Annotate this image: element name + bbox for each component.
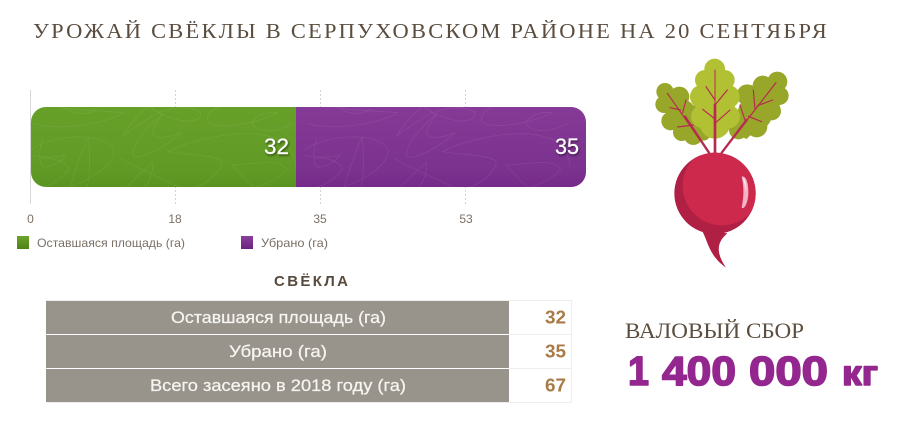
axis labels: 0	[27, 212, 34, 226]
table	[46, 300, 572, 402]
axis labels: 53	[459, 212, 473, 226]
highlight	[742, 176, 748, 208]
gross harvest value	[628, 348, 878, 394]
row: remaining area: 32	[545, 308, 566, 328]
gross harvest value: кг	[842, 354, 878, 393]
row: remaining area: Оставшаяся площадь (га)	[171, 308, 386, 327]
chart grid lines	[30, 90, 466, 204]
left leaf	[655, 83, 711, 145]
row: harvested: Убрано (га)	[229, 342, 327, 361]
stems and veins	[667, 70, 776, 153]
gross harvest value: 1	[628, 348, 649, 394]
row: total sown: 67	[545, 376, 566, 396]
legend	[17, 236, 328, 250]
gross harvest label: ВАЛОВЫЙ СБОР	[625, 318, 804, 343]
root	[702, 230, 727, 268]
axis labels	[27, 212, 473, 226]
axis labels: 35	[313, 212, 327, 226]
row: harvested	[46, 335, 566, 368]
value: 32: 32	[264, 134, 289, 159]
value: 35: 35	[555, 134, 579, 159]
gross harvest value: 000	[749, 348, 828, 394]
row: total sown	[46, 369, 566, 402]
right leaf	[729, 72, 789, 139]
row: harvested: 35	[545, 342, 566, 362]
icon: beet	[655, 59, 789, 268]
center leaf	[690, 59, 740, 139]
axis labels: 18	[168, 212, 182, 226]
heading: table: СВЁКЛА	[274, 273, 348, 290]
title: УРОЖАЙ СВЁКЛЫ В СЕРПУХОВСКОМ РАЙОНЕ НА 20 СЕНТЯБРЯ	[33, 19, 829, 43]
gross harvest value: 400	[662, 348, 736, 394]
row: total sown: Всего засеяно в 2018 году (га)	[150, 376, 406, 395]
row: remaining area	[46, 301, 566, 334]
legend: harvested: Убрано (га)	[261, 236, 328, 250]
bar segments	[31, 107, 586, 187]
legend: remaining area: Оставшаяся площадь (га)	[37, 236, 185, 250]
table frame	[46, 300, 572, 402]
stacked bar chart	[27, 90, 586, 226]
